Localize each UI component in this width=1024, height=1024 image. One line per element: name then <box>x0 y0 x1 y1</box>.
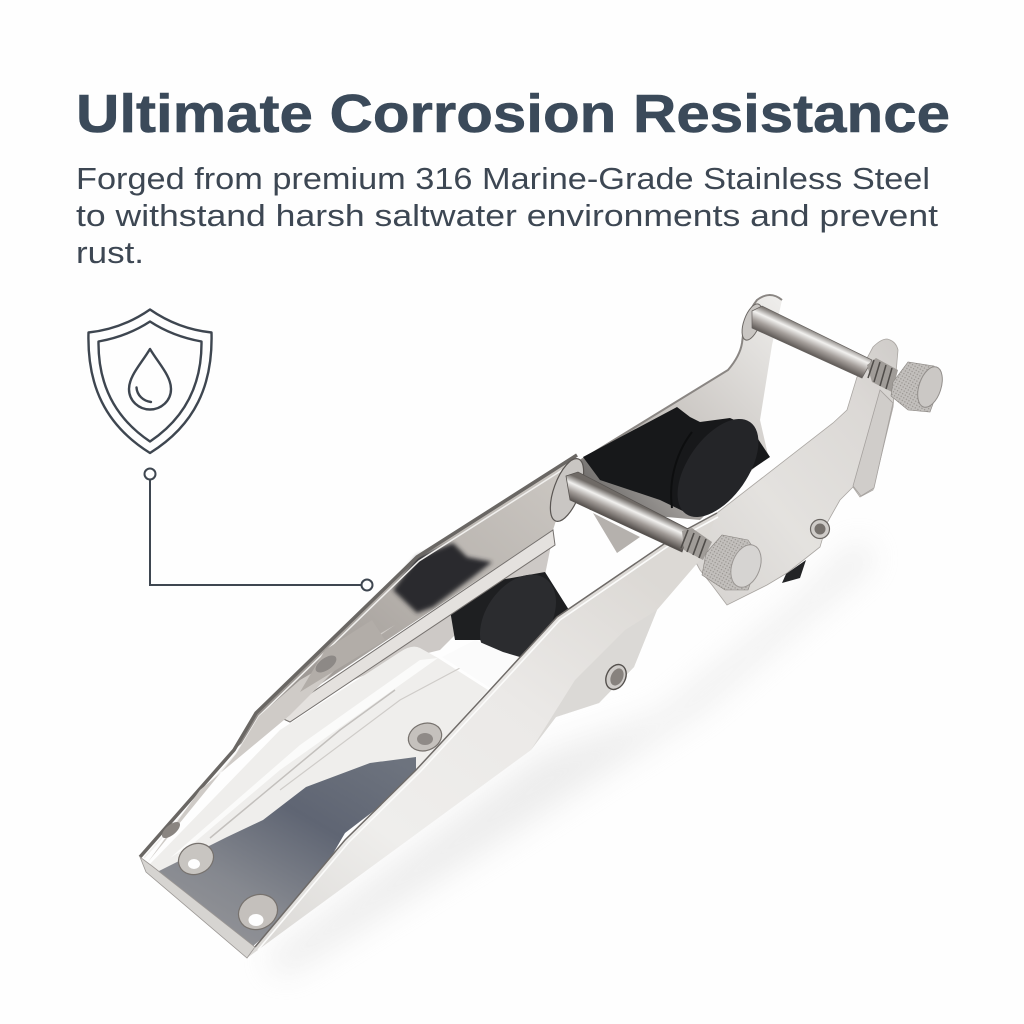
rear plate flange <box>853 390 893 496</box>
callout leader line <box>144 468 372 590</box>
near front wall <box>247 513 717 958</box>
description text <box>76 161 938 270</box>
rear knob <box>891 362 947 412</box>
gap behind floor <box>442 640 530 688</box>
tip wall reflection <box>148 625 395 862</box>
hex socket screw <box>810 520 830 538</box>
front roller <box>450 560 572 676</box>
plate front edge <box>140 857 255 958</box>
front knob <box>702 535 767 591</box>
product: stainless steel bow roller bracket <box>140 295 947 975</box>
title: Ultimate Corrosion Resistance <box>76 84 950 144</box>
front pin <box>566 472 690 552</box>
front far wall <box>234 455 577 750</box>
front washer <box>543 455 591 525</box>
description text: Forged from premium 316 Marine-Grade Stainless Steel <box>76 161 930 196</box>
rear far wall rim <box>565 295 782 470</box>
central ridge on far wall <box>277 530 555 722</box>
side hex screw <box>602 661 630 693</box>
floor dark reflection <box>155 757 416 947</box>
front far wall lower section <box>280 535 553 716</box>
near wall lower flange <box>531 610 657 750</box>
rear far wall <box>565 295 782 520</box>
rear threads <box>867 358 898 392</box>
floor bright panel <box>150 647 488 947</box>
rear roller <box>583 405 775 531</box>
front threads <box>681 528 712 560</box>
icon: shield with water drop <box>88 310 212 453</box>
near wall top edge <box>255 513 717 947</box>
countersunk holes <box>173 718 446 936</box>
rear near plate <box>680 339 898 605</box>
ground shadow <box>265 540 875 975</box>
description text: to withstand harsh saltwater environments and prevent <box>76 198 938 233</box>
rear washer <box>738 301 766 343</box>
rear pin <box>752 306 872 378</box>
far rim highlight <box>140 455 577 857</box>
rear rubber foot <box>782 560 806 583</box>
dark reflection on far wall <box>393 543 492 613</box>
rear tail under pin <box>593 513 640 553</box>
description text: rust. <box>76 235 144 270</box>
